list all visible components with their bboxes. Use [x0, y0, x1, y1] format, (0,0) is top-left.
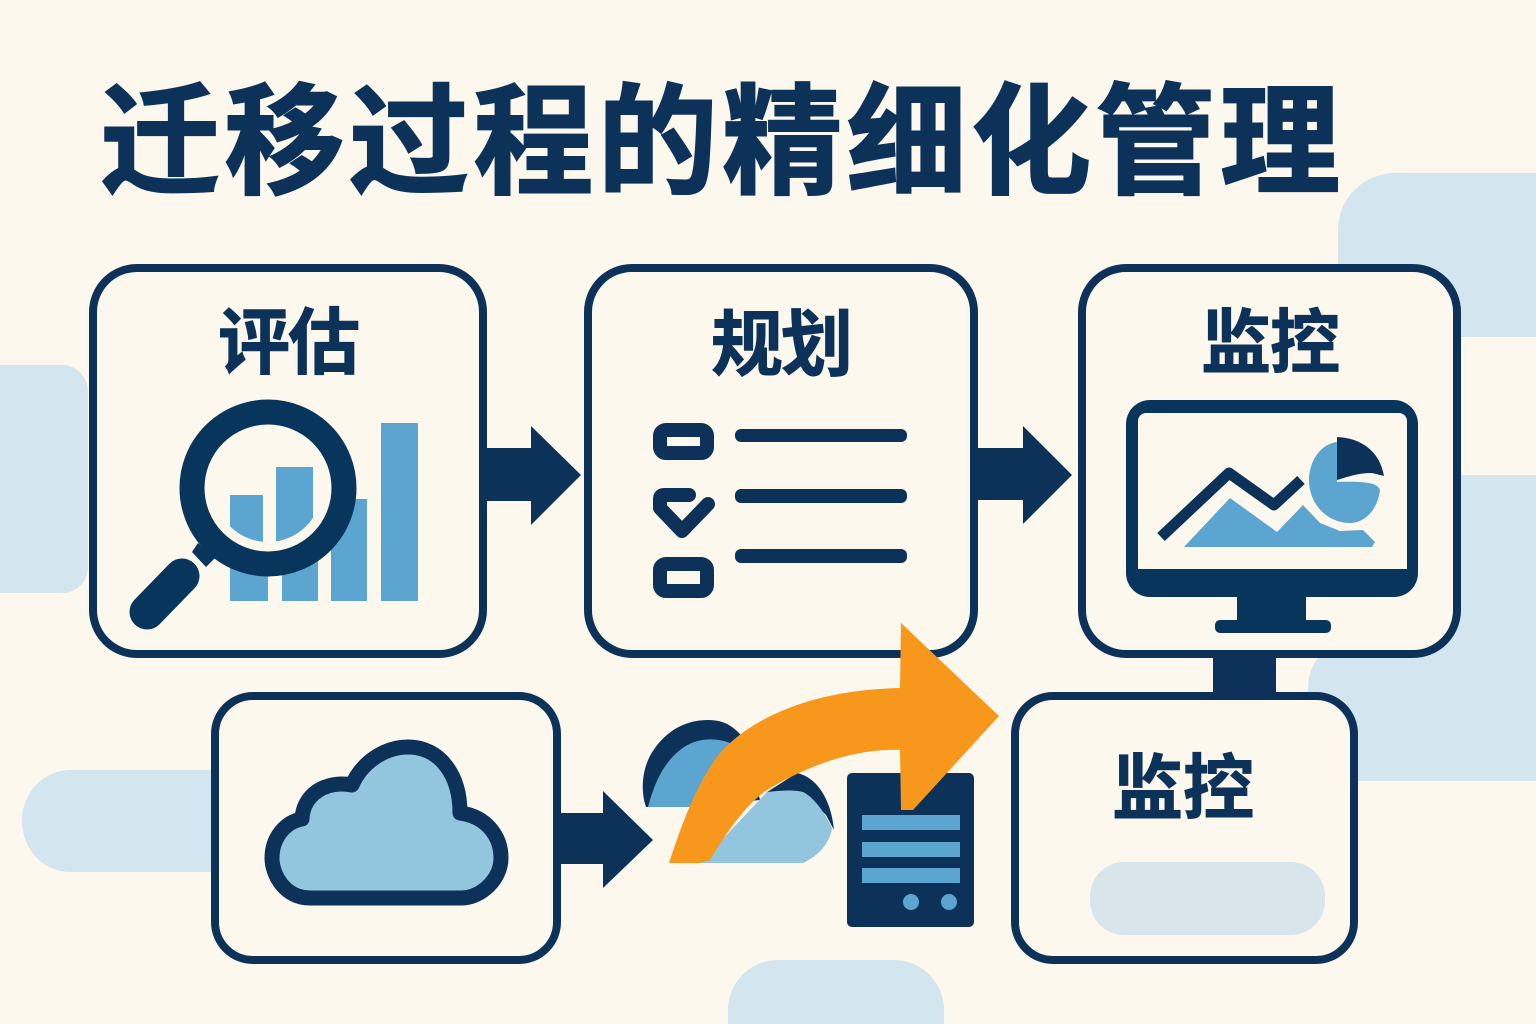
heading: assess: 评估: [218, 304, 360, 384]
icon: checklist: [660, 429, 907, 591]
panel: monitor top: [1082, 268, 1457, 654]
panel: cloud source: [215, 696, 557, 960]
panel: monitor bottom: [1015, 696, 1354, 960]
icon: server: [847, 773, 974, 927]
panel: plan: [588, 268, 974, 654]
arrow: assess to plan: [487, 426, 581, 525]
heading: monitor bottom: 监控: [1112, 750, 1254, 829]
heading: plan: 规划: [711, 306, 853, 386]
placeholder pill: [1090, 862, 1325, 935]
arrow: cloud to migration: [558, 791, 653, 888]
heading: monitor top: 监控: [1201, 304, 1340, 382]
icon: monitor with charts: [1126, 400, 1418, 633]
icon: bar chart with magnifier: [147, 412, 418, 612]
panel: assess: [93, 268, 483, 654]
arrow: orange migration: [669, 623, 999, 863]
arrow: plan to monitor: [978, 426, 1072, 524]
icon: small clouds: [643, 720, 834, 863]
icon: cloud: [272, 747, 501, 898]
title: 迁移过程的精细化管理: [100, 76, 1340, 210]
connector: monitor stand: [1213, 650, 1276, 700]
